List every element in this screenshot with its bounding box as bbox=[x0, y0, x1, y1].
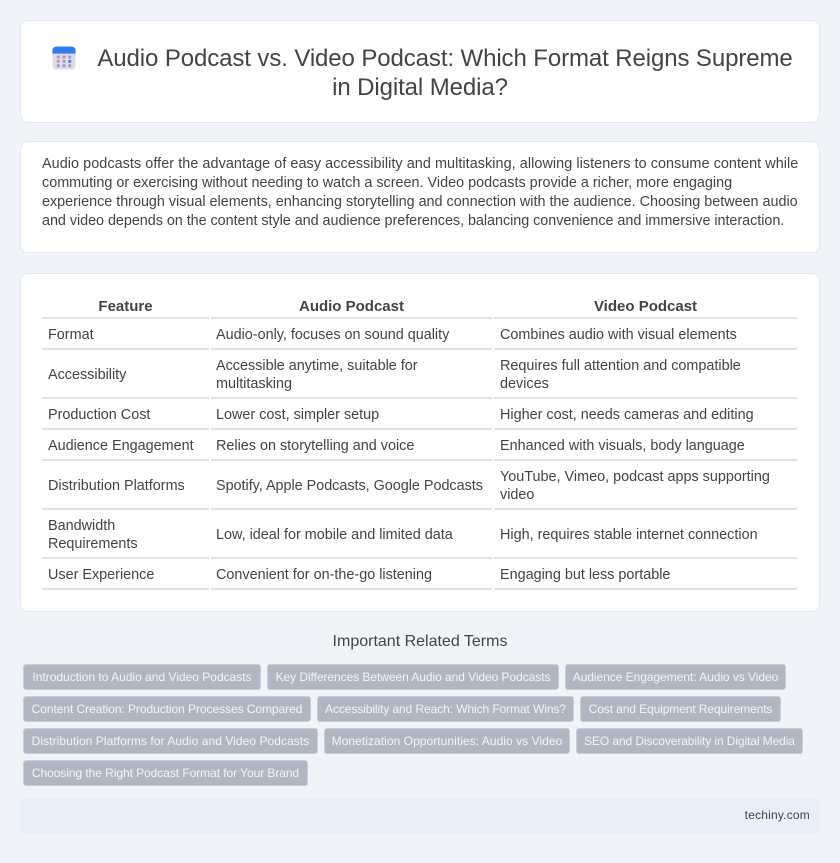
table panel bbox=[20, 273, 820, 612]
table header: Audio Podcast bbox=[299, 298, 404, 315]
tag bbox=[580, 696, 781, 722]
row: audience engagement: Enhanced with visuals, body language bbox=[500, 438, 745, 454]
footer source: techiny.com bbox=[745, 808, 810, 822]
intro text: Audio podcasts offer the advantage of easy accessibility and multitasking, allowing listeners to consume content while bbox=[42, 156, 798, 172]
row: format: Format bbox=[48, 327, 94, 343]
title: in Digital Media? bbox=[332, 74, 508, 101]
intro text: experience through visual elements, enhancing storytelling and connection with the audience. Choosing between audio bbox=[42, 194, 798, 210]
related terms heading: Important Related Terms bbox=[333, 633, 507, 650]
row: distribution platforms: YouTube, Vimeo, podcast apps supporting bbox=[500, 469, 770, 485]
tag: Choosing the Right Podcast Format for Your Brand bbox=[32, 766, 299, 780]
tag bbox=[23, 696, 311, 722]
icon: calendar bbox=[52, 46, 76, 70]
tag: SEO and Discoverability in Digital Media bbox=[584, 734, 795, 748]
row: distribution platforms: Distribution Platforms bbox=[48, 478, 185, 494]
tag: Cost and Equipment Requirements bbox=[589, 702, 772, 716]
row: accessibility: Accessibility bbox=[48, 367, 126, 383]
row: user experience bbox=[48, 567, 670, 583]
title bbox=[97, 44, 793, 101]
tag: Monetization Opportunities: Audio vs Video bbox=[332, 734, 562, 748]
table header: Video Podcast bbox=[594, 298, 697, 315]
tag: Accessibility and Reach: Which Format Wins? bbox=[325, 702, 566, 716]
tag bbox=[317, 696, 574, 722]
tag bbox=[23, 664, 261, 690]
row: accessibility: Requires full attention and compatible bbox=[500, 358, 741, 374]
row: format bbox=[48, 327, 737, 343]
row: bandwidth requirements: Bandwidth bbox=[48, 518, 115, 534]
row: audience engagement: Relies on storytelling and voice bbox=[216, 438, 414, 454]
comparison table bbox=[42, 298, 797, 590]
tag: Content Creation: Production Processes Compared bbox=[32, 702, 302, 716]
row: distribution platforms bbox=[48, 469, 770, 503]
row: accessibility bbox=[48, 358, 741, 392]
row: bandwidth requirements: High, requires stable internet connection bbox=[500, 527, 758, 543]
row: format: Audio-only, focuses on sound quality bbox=[216, 327, 449, 343]
row: user experience: Engaging but less portable bbox=[500, 567, 670, 583]
tag: Key Differences Between Audio and Video Podcasts bbox=[276, 670, 550, 684]
intro text: and video depends on the content style and audience preferences, balancing convenience and immersive interaction. bbox=[42, 213, 784, 229]
tag: Audience Engagement: Audio vs Video bbox=[573, 670, 778, 684]
table header: Feature bbox=[98, 298, 153, 315]
row: distribution platforms: Spotify, Apple Podcasts, Google Podcasts bbox=[216, 478, 483, 494]
tag bbox=[324, 728, 570, 754]
tag: Introduction to Audio and Video Podcasts bbox=[32, 670, 252, 684]
row: bandwidth requirements bbox=[48, 518, 758, 552]
header panel bbox=[20, 20, 820, 123]
row: bandwidth requirements: Requirements bbox=[48, 536, 138, 552]
row: audience engagement: Audience Engagement bbox=[48, 438, 194, 454]
tag bbox=[565, 664, 786, 690]
related terms tags bbox=[23, 664, 803, 786]
footer bbox=[20, 799, 820, 833]
row: production cost bbox=[48, 407, 754, 423]
row: format: Combines audio with visual elements bbox=[500, 327, 737, 343]
row: accessibility: multitasking bbox=[216, 376, 292, 392]
row: distribution platforms: video bbox=[500, 487, 534, 503]
tag bbox=[23, 760, 308, 786]
row: production cost: Lower cost, simpler setup bbox=[216, 407, 379, 423]
tag bbox=[23, 728, 318, 754]
row: accessibility: devices bbox=[500, 376, 549, 392]
table header bbox=[98, 298, 697, 315]
row: audience engagement bbox=[48, 438, 745, 454]
intro text bbox=[42, 156, 798, 229]
row: bandwidth requirements: Low, ideal for mobile and limited data bbox=[216, 527, 453, 543]
tag bbox=[267, 664, 559, 690]
tag bbox=[576, 728, 803, 754]
row: production cost: Higher cost, needs cameras and editing bbox=[500, 407, 754, 423]
row: accessibility: Accessible anytime, suitable for bbox=[216, 358, 418, 374]
title: Audio Podcast vs. Video Podcast: Which Format Reigns Supreme bbox=[97, 44, 793, 72]
tag: Distribution Platforms for Audio and Video Podcasts bbox=[32, 734, 309, 748]
intro panel bbox=[20, 141, 820, 253]
intro text: commuting or exercising without needing to watch a screen. Video podcasts provide a richer, more engaging bbox=[42, 175, 732, 191]
row: production cost: Production Cost bbox=[48, 407, 150, 423]
row: user experience: Convenient for on-the-go listening bbox=[216, 567, 432, 583]
row: user experience: User Experience bbox=[48, 567, 154, 583]
